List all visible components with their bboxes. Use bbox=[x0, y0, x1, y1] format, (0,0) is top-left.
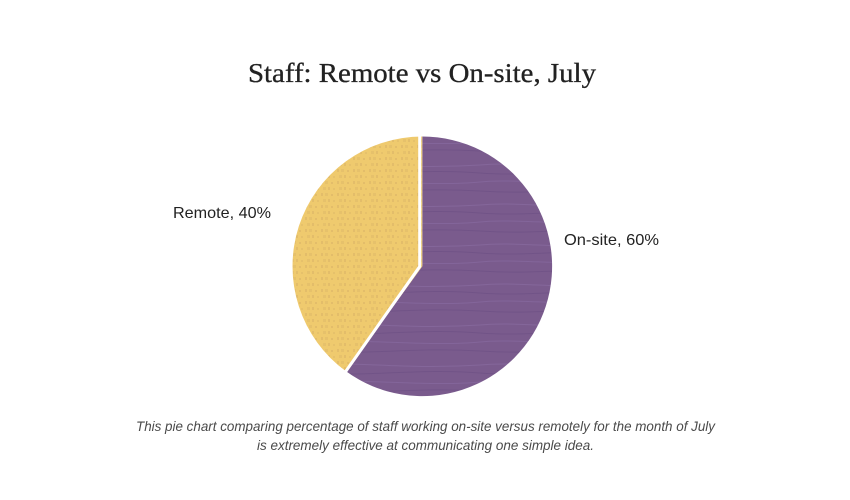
pie chart bbox=[293, 135, 552, 396]
caption line 2: is extremely effective at communicating one simple idea. bbox=[257, 437, 594, 453]
slice: on-site 60% bbox=[346, 136, 552, 396]
slice separator bbox=[346, 135, 420, 372]
slice: remote 40% bbox=[293, 136, 422, 371]
caption line 1: This pie chart comparing percentage of staff working on-site versus remotely for the month of July bbox=[136, 418, 716, 434]
title: Staff: Remote vs On-site, July bbox=[248, 58, 597, 88]
caption bbox=[136, 418, 716, 453]
label: on-site: On-site, 60% bbox=[564, 232, 659, 249]
label: remote: Remote, 40% bbox=[173, 205, 271, 222]
